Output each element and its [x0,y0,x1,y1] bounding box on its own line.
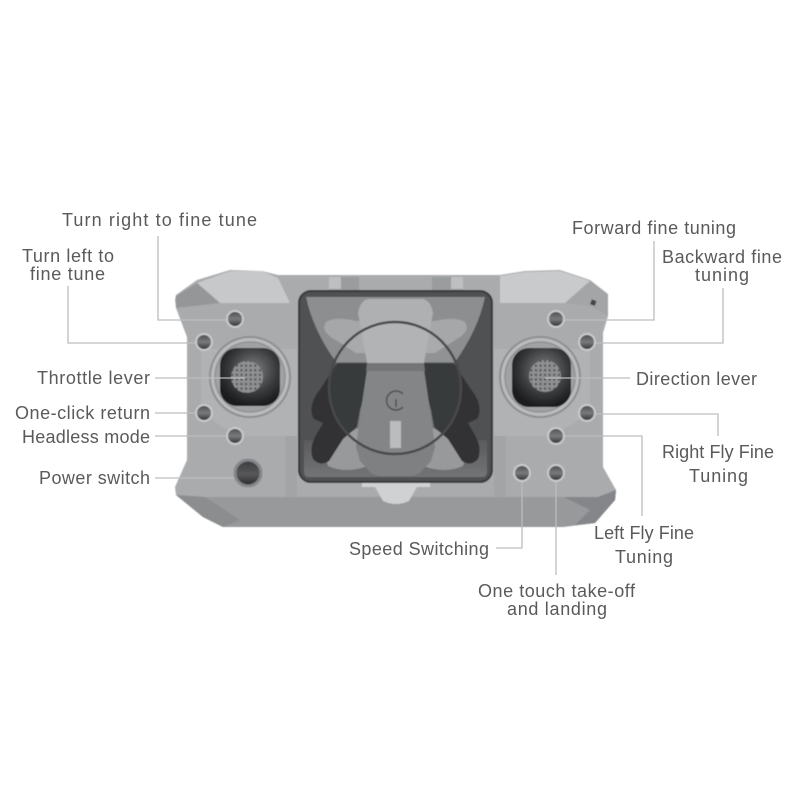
right shoulder bevel [500,271,590,303]
leader lines [68,236,723,575]
left shoulder bevel [197,271,290,303]
right lever [500,337,580,417]
power switch [235,460,261,486]
clear dome [329,322,461,454]
label: left fly fine tuning: Tuning [615,547,673,567]
label: turn left to fine tune: Turn left to [22,246,114,266]
bottom latch [362,482,430,504]
label: right fly fine tuning: Right Fly Fine [662,442,774,462]
label: left fly fine tuning [594,523,694,567]
label: turn right to fine tune: Turn right to fine tune [62,210,257,230]
label: forward fine tuning: Forward fine tuning [572,218,736,238]
window with drone [299,291,492,482]
buttons [196,311,595,481]
label: backward fine tuning: tuning [695,265,749,285]
label: right fly fine tuning: Tuning [689,466,748,486]
label: backward fine tuning [662,247,782,285]
label: throttle lever: Throttle lever [37,368,150,388]
label: turn left to fine tune [22,246,114,284]
hinges [329,277,359,291]
label: headless mode: Headless mode [22,427,150,447]
left lever [210,337,290,417]
drone front arms [327,428,464,470]
drone power logo [387,391,403,410]
drone brand mark [390,421,401,448]
label: power switch: Power switch [39,468,150,488]
drone rear arms [324,319,467,353]
label: one touch take-off and landing [478,581,636,619]
label: turn left to fine tune: fine tune [30,264,105,284]
label: right fly fine tuning [662,442,774,486]
drone dark propellers [311,363,368,464]
label: backward fine tuning: Backward fine [662,247,782,267]
lower body band [176,490,616,527]
label: one touch take-off and landing: and landing [507,599,607,619]
label: speed switching: Speed Switching [349,539,489,559]
lever plates [201,349,297,436]
label: one-click return: One-click return [15,403,150,423]
label: direction lever: Direction lever [636,369,757,389]
controller body [175,270,616,527]
drone body [356,363,435,476]
label: left fly fine tuning: Left Fly Fine [594,523,694,543]
label: one touch take-off and landing: One touch take-off [478,581,636,601]
